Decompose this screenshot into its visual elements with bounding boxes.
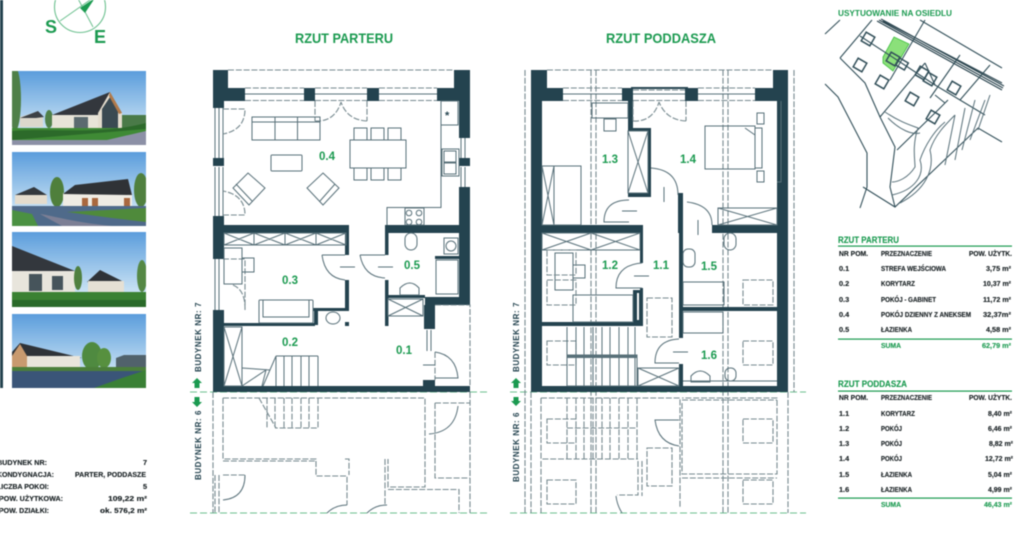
ground floor: sofa [252, 117, 320, 140]
table: rzut poddasza: RZUT PODDASZA [838, 379, 907, 390]
site map: road [877, 19, 1004, 90]
table: rzut parteru: 3,75 m² [986, 264, 1012, 273]
info block: 7 [143, 458, 147, 467]
building 7 label, ground floor: BUDYNEK NR: 7 [193, 302, 203, 372]
room labels: attic: 1.2 [602, 260, 618, 272]
table: rzut parteru: 0.5 [839, 325, 849, 334]
ground floor: door swings [223, 102, 367, 310]
info block [0, 458, 148, 515]
info block: POW. UŻYTKOWA: [0, 494, 63, 503]
site map [825, 9, 1004, 208]
table: rzut poddasza: 8,82 m² [989, 439, 1014, 448]
table: rzut poddasza: 1.2 [839, 424, 849, 433]
table: rzut poddasza: 1.6 [839, 485, 849, 494]
table: rzut poddasza: POKÓJ [881, 424, 902, 433]
site map: contour lines [885, 95, 990, 203]
photo 2 [11, 151, 147, 227]
heading: rzut poddasza: RZUT PODDASZA [606, 30, 716, 46]
table: rzut poddasza: 4,99 m² [988, 485, 1013, 494]
ground floor: neighbouring building outline [213, 392, 470, 513]
table: rzut poddasza [838, 379, 1014, 509]
table: rzut parteru: 0.4 [839, 310, 850, 319]
attic: stairs [567, 327, 679, 386]
table: rzut poddasza: 1.1 [839, 409, 849, 418]
attic: walls [531, 70, 788, 392]
room labels: ground floor: 0.2 [282, 337, 298, 349]
table: rzut parteru: PRZEZNACZENIE [881, 249, 932, 258]
icon: compass: E [94, 27, 106, 47]
room labels: attic: 1.5 [701, 261, 718, 273]
table: rzut parteru: KORYTARZ [881, 279, 915, 288]
ground floor: kitchen: * [445, 110, 450, 122]
table: rzut poddasza: PRZEZNACZENIE [881, 393, 932, 402]
table: rzut parteru: 62,79 m² [982, 341, 1012, 350]
info block: POW. DZIAŁKI: [0, 506, 49, 515]
table: rzut parteru: 0.3 [839, 295, 849, 304]
room labels: attic: 1.3 [602, 154, 618, 166]
table: rzut parteru: RZUT PARTERU [838, 235, 899, 246]
table: rzut poddasza: 46,43 m² [984, 500, 1013, 509]
room labels: attic: 1.6 [701, 350, 717, 362]
room labels: attic: 1.1 [653, 260, 670, 272]
room labels: ground floor: 0.4 [319, 151, 336, 163]
attic: room 1.5 and 1.6 bathrooms [683, 233, 777, 382]
site map: highlighted plot [883, 37, 909, 71]
table: rzut parteru [838, 235, 1012, 350]
table: rzut poddasza: SUMA [881, 500, 902, 509]
building 6 label, ground floor: BUDYNEK NR: 6 [193, 410, 203, 480]
site map: title: USYTUOWANIE NA OSIEDLU [838, 9, 952, 18]
table: rzut poddasza: 5,04 m² [988, 470, 1013, 479]
room labels: ground floor: 0.5 [404, 260, 421, 272]
attic: room 1.4 bed and wardrobe [705, 101, 781, 225]
table: rzut poddasza: ŁAZIENKA [881, 470, 913, 479]
photo 4 [11, 313, 147, 389]
icon: compass [45, 0, 106, 47]
info block: 109,22 m² [108, 494, 148, 503]
table: rzut parteru: NR POM. [839, 249, 868, 258]
room labels: ground floor: 0.1 [396, 345, 413, 357]
table: rzut parteru: POW. UŻYTK. [969, 249, 1012, 258]
site map: houses [853, 32, 961, 124]
heading: rzut parteru: RZUT PARTERU [295, 30, 393, 46]
ground floor: walls [213, 70, 470, 392]
room labels: ground floor [282, 151, 421, 357]
attic: doors [604, 168, 712, 363]
building 6 label, attic: BUDYNEK NR: 6 [511, 412, 521, 482]
table: rzut poddasza: 12,72 m² [985, 454, 1014, 463]
ground floor: kitchen [387, 101, 459, 225]
attic: balcony doors [633, 102, 686, 121]
table: rzut parteru: 32,37m² [983, 310, 1012, 319]
table: rzut poddasza: 8,40 m² [988, 409, 1013, 418]
floor plan: ground floor [213, 70, 470, 513]
side bar [0, 0, 3, 388]
attic: room 1.3 furniture [542, 103, 648, 225]
ground floor: stairs and closet [224, 327, 318, 386]
table: rzut poddasza: POKÓJ [881, 454, 902, 463]
table: rzut poddasza: 6,46 m² [988, 424, 1013, 433]
table: rzut parteru: SUMA [881, 341, 902, 350]
room labels: attic: 1.4 [680, 154, 697, 166]
table: rzut poddasza: KORYTARZ [881, 409, 915, 418]
info block: PARTER, PODDASZE [75, 470, 146, 479]
table: rzut parteru: ŁAZIENKA [881, 325, 913, 334]
table: rzut poddasza: NR POM. [839, 393, 868, 402]
ground floor: coffee table and armchairs [233, 155, 339, 205]
table: rzut parteru: 11,72 m² [983, 295, 1012, 304]
table: rzut parteru: 0.2 [839, 279, 849, 288]
ground floor: study furniture [224, 233, 346, 324]
ground floor: entry [423, 305, 470, 386]
table: rzut poddasza: 1.3 [839, 439, 849, 448]
info block: 5 [143, 482, 147, 491]
table: rzut parteru: STREFA WEJŚCIOWA [881, 264, 947, 273]
attic: room 1.2 furniture [542, 233, 640, 322]
table: rzut parteru: 4,58 m² [986, 325, 1012, 334]
info block: ok. 576,2 m² [100, 506, 148, 515]
table: rzut parteru: 0.1 [839, 264, 849, 273]
room labels: attic [602, 154, 718, 362]
table: rzut parteru: 10,37 m² [983, 279, 1012, 288]
table: rzut poddasza: 1.5 [839, 470, 849, 479]
table: rzut poddasza: POW. UŻYTK. [969, 393, 1012, 402]
ground floor: bathroom fixtures [388, 233, 458, 316]
table: rzut parteru: POKÓJ DZIENNY Z ANEKSEM [881, 310, 971, 319]
table: rzut poddasza: 1.4 [839, 454, 850, 463]
icon: compass: S [45, 17, 57, 37]
room labels: ground floor: 0.3 [282, 275, 298, 287]
table: rzut parteru: POKÓJ - GABINET [881, 295, 936, 304]
attic: neighbouring building outline [531, 392, 788, 513]
ground floor: inner doors [322, 255, 393, 280]
photo 1 [11, 70, 147, 146]
ground floor: dining table [350, 128, 406, 180]
site map: plot lines [825, 20, 1002, 208]
photo 3 [11, 231, 147, 308]
table: rzut poddasza: POKÓJ [881, 439, 902, 448]
floor plan: attic [525, 70, 794, 513]
table: rzut poddasza: ŁAZIENKA [881, 485, 913, 494]
building 7 label, attic: BUDYNEK NR: 7 [511, 302, 521, 372]
